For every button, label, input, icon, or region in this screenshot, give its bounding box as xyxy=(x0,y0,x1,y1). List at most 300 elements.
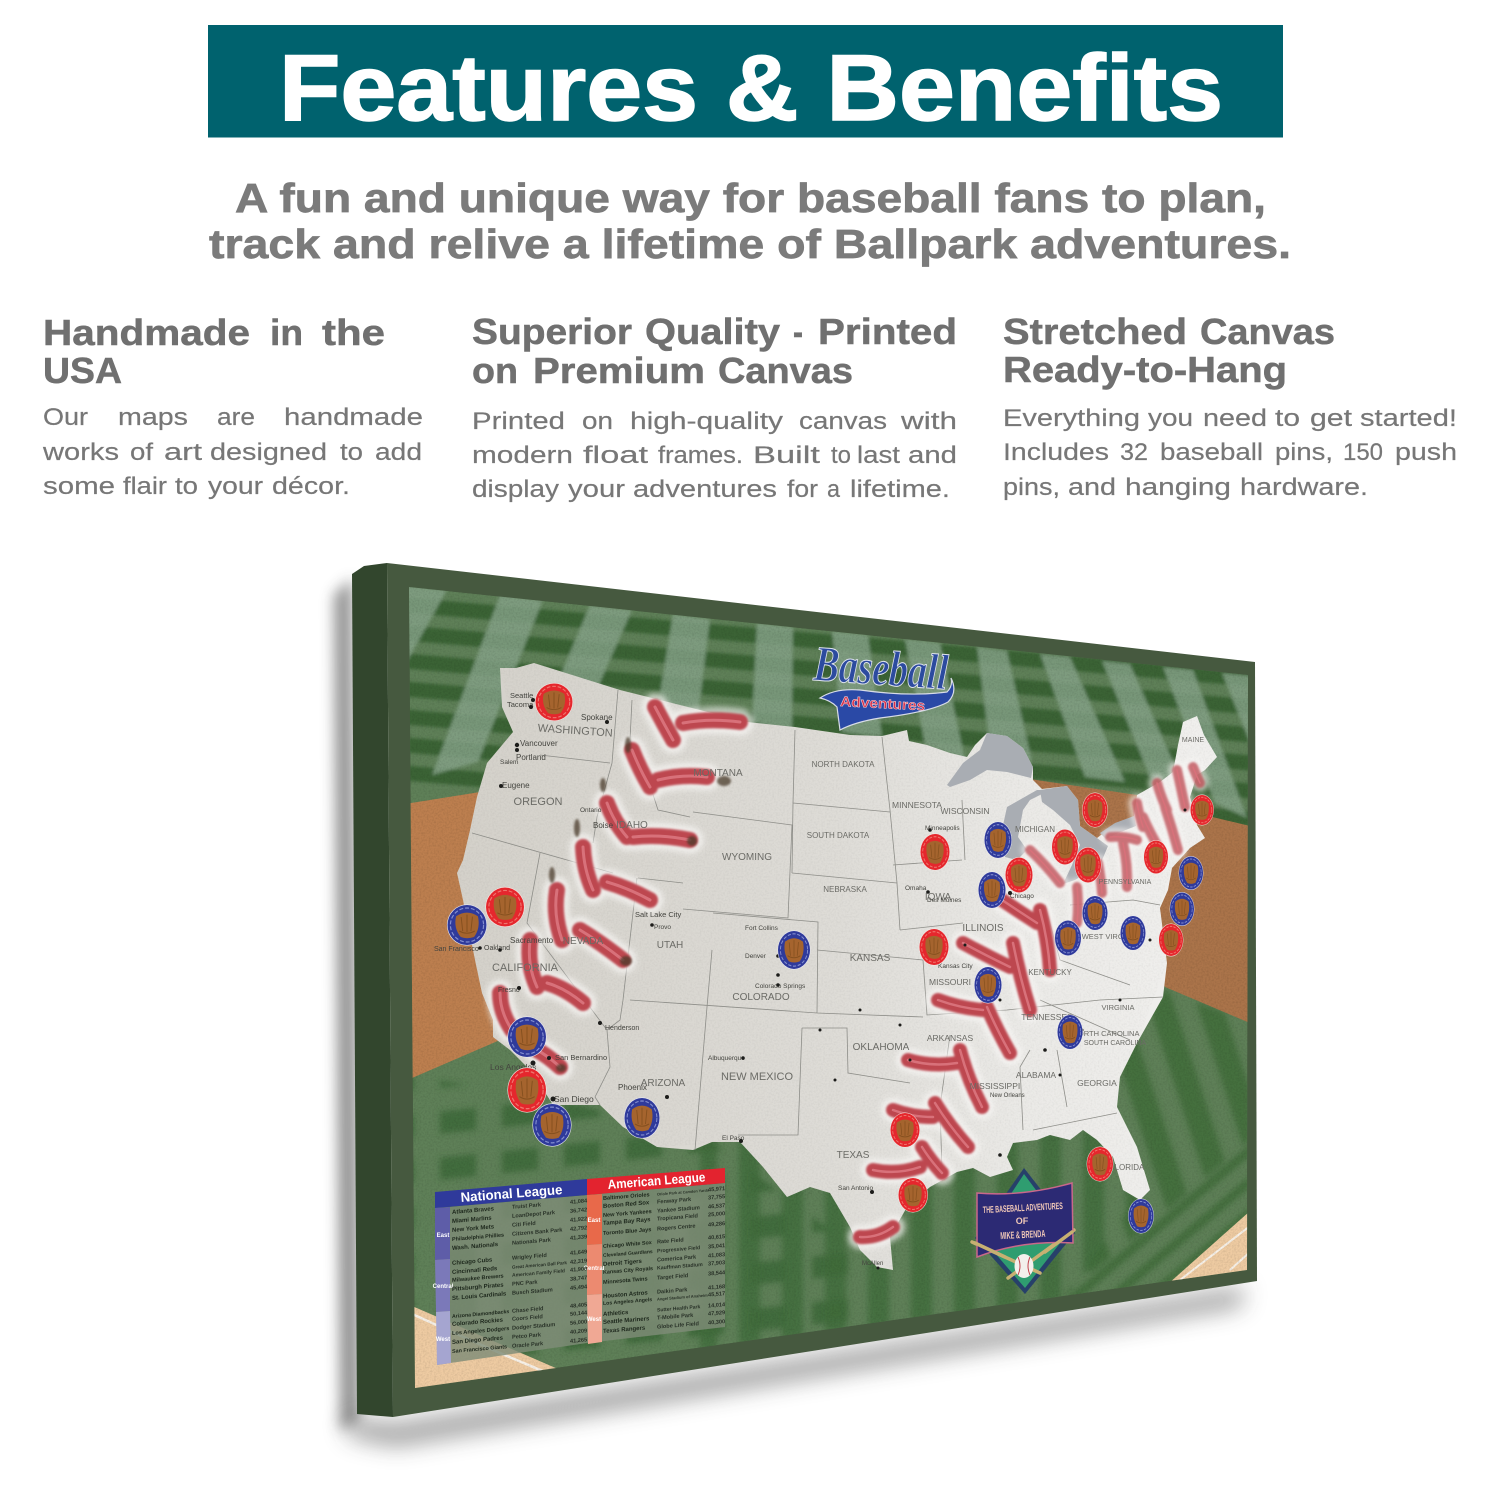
state labels: NEBRASKA xyxy=(823,885,867,894)
state labels: MISSISSIPPI xyxy=(970,1081,1020,1091)
city labels: Tacoma xyxy=(507,700,534,709)
city labels: Salem xyxy=(500,759,518,766)
American League rows: Oriole Park at Camden Yards xyxy=(657,1188,709,1197)
American League rows: Toronto Blue Jays xyxy=(603,1227,651,1237)
city labels: Eugene xyxy=(502,781,530,790)
banner title: Features & Benefits xyxy=(279,35,1223,140)
canvas drop shadow xyxy=(334,578,1245,1445)
third base line right xyxy=(1172,1214,1248,1281)
American League rows: 47,929 xyxy=(708,1310,725,1318)
American League rows: 40,615 xyxy=(708,1234,725,1242)
body: handmade: your xyxy=(208,473,263,500)
heading: superior quality: - xyxy=(793,311,803,352)
logo swoosh xyxy=(820,678,954,730)
American League rows: Athletics xyxy=(603,1310,629,1318)
stitch holes xyxy=(549,737,731,1072)
state labels: MAINE xyxy=(1182,737,1204,744)
body: handmade: to xyxy=(175,473,198,500)
heading: superior quality: Canvas xyxy=(718,350,853,391)
National League rows: American Family Field xyxy=(512,1268,565,1279)
subheading: track and relive a lifetime of Ballpark adventures. xyxy=(209,221,1291,267)
body: handmade: are xyxy=(217,404,255,431)
city labels: Portland xyxy=(516,753,546,762)
American League division bars: East xyxy=(588,1218,600,1224)
body: stretched canvas: hanging xyxy=(1125,474,1231,501)
state labels: MONTANA xyxy=(693,768,743,779)
American League rows: Cleveland Guardians xyxy=(603,1249,653,1259)
body: stretched canvas: baseball xyxy=(1160,439,1263,466)
National League rows: Chicago Cubs xyxy=(452,1257,493,1267)
American League rows: 45,517 xyxy=(708,1291,725,1299)
body: handmade: to xyxy=(340,439,363,466)
feature column: stretched canvas xyxy=(1003,311,1457,501)
blue pins: National League xyxy=(447,821,1203,1234)
National League rows: St. Louis Cardinals xyxy=(452,1291,507,1302)
city labels: Oakland xyxy=(484,945,510,952)
heading: superior quality: on xyxy=(472,350,518,391)
American League rows: Progressive Field xyxy=(657,1245,700,1255)
American League rows: 38,544 xyxy=(708,1270,726,1278)
National League rows: 36,742 xyxy=(570,1207,587,1215)
body: superior quality: a xyxy=(827,476,840,503)
National League rows: 41,265 xyxy=(570,1337,587,1345)
National League rows: Coors Field xyxy=(512,1314,543,1323)
heading: stretched canvas: Stretched xyxy=(1003,311,1187,352)
heading: handmade in the USA: the xyxy=(322,312,385,353)
plaque text: MIKE & BRENDA xyxy=(1000,1229,1046,1242)
heading: stretched canvas xyxy=(1003,311,1335,390)
great lakes xyxy=(947,733,1136,884)
city labels: Chicago xyxy=(1010,893,1034,900)
National League rows: Wrigley Field xyxy=(512,1253,547,1262)
city labels: Sacramento xyxy=(510,936,554,945)
body: superior quality: display xyxy=(472,476,560,503)
body: stretched canvas: 32 xyxy=(1120,439,1148,466)
National League rows: 38,747 xyxy=(570,1275,587,1283)
National League rows: Citi Field xyxy=(512,1221,536,1229)
American League rows: Tropicana Field xyxy=(657,1213,699,1223)
heading: handmade in the USA xyxy=(43,312,385,391)
National League division bars xyxy=(433,1207,454,1365)
state labels: TENNESSEE xyxy=(1021,1012,1073,1022)
National League rows: Truist Park xyxy=(512,1202,542,1211)
American League rows: 40,300 xyxy=(708,1319,725,1327)
outfield light stripes xyxy=(405,585,1252,818)
state labels: IDAHO xyxy=(616,820,648,831)
American League rows: 37,903 xyxy=(708,1260,725,1268)
city labels: Seattle xyxy=(510,691,533,700)
state labels: VIRGINIA xyxy=(1102,1003,1134,1012)
state labels: MISSOURI xyxy=(929,977,971,987)
American League rows: Yankee Stadium xyxy=(657,1205,700,1215)
body: superior quality: and xyxy=(908,442,957,469)
state labels: COLORADO xyxy=(732,992,790,1003)
state borders xyxy=(472,690,1163,1170)
body: stretched canvas: get xyxy=(1310,405,1352,432)
body: superior quality: lifetime. xyxy=(850,476,950,503)
city labels: Boise xyxy=(593,821,614,830)
body: superior quality: Printed xyxy=(472,408,565,435)
American League rows: 46,537 xyxy=(708,1203,725,1211)
heading: stretched canvas: Ready-to-Hang xyxy=(1003,349,1287,390)
state labels: ALABAMA xyxy=(1016,1070,1056,1080)
field artwork xyxy=(400,585,1260,1400)
state labels: ILLINOIS xyxy=(962,923,1004,934)
plaque diamond field xyxy=(982,1174,1068,1288)
heading: superior quality: Premium xyxy=(533,350,705,391)
American League rows: Chicago White Sox xyxy=(603,1240,652,1250)
body: stretched canvas: push xyxy=(1395,439,1457,466)
state labels: OKLAHOMA xyxy=(853,1042,910,1053)
city labels: New Orleans xyxy=(990,1093,1025,1099)
body: superior quality: frames. xyxy=(658,442,743,469)
body: handmade: flair xyxy=(123,473,167,500)
heading: handmade in the USA: Handmade xyxy=(43,312,250,353)
National League rows: Miami Marlins xyxy=(452,1216,492,1225)
National League rows: 41,922 xyxy=(570,1216,587,1224)
city labels: Los Angeles xyxy=(490,1062,536,1072)
National League rows: 50,144 xyxy=(570,1310,588,1318)
National League rows: San Francisco Giants xyxy=(452,1344,507,1355)
state labels: NORTH CAROLINA xyxy=(1073,1029,1139,1038)
city labels: El Paso xyxy=(722,1135,745,1142)
body: handmade: of xyxy=(130,439,153,466)
US map baseball xyxy=(434,663,1217,1270)
subheading xyxy=(209,175,1291,267)
National League rows xyxy=(452,1198,588,1355)
body: handmade: maps xyxy=(118,404,188,431)
city labels: Henderson xyxy=(605,1025,639,1032)
National League rows: 40,209 xyxy=(570,1328,587,1336)
body: handmade: works xyxy=(42,439,119,466)
field grain xyxy=(409,587,1248,1388)
baseball xyxy=(1014,1254,1034,1278)
body: stretched canvas: pins, xyxy=(1003,474,1060,501)
city labels: Fort Collins xyxy=(745,925,779,932)
state labels: GEORGIA xyxy=(1077,1078,1117,1088)
crossed bats over banner xyxy=(975,1232,1072,1257)
heading: handmade in the USA: USA xyxy=(43,350,122,391)
right infield dirt xyxy=(1030,779,1250,1023)
city labels: Phoenix xyxy=(618,1083,647,1092)
American League rows: Texas Rangers xyxy=(603,1326,646,1335)
city labels: Albuquerque xyxy=(708,1055,745,1062)
National League rows: Wash. Nationals xyxy=(452,1242,499,1252)
American League header: American League xyxy=(607,1169,706,1192)
National League division bars: East xyxy=(437,1233,449,1239)
state labels: ARIZONA xyxy=(641,1078,686,1089)
heading: superior quality: Quality xyxy=(645,311,780,352)
American League rows: Kauffman Stadium xyxy=(657,1262,703,1272)
body: handmade: add xyxy=(375,439,422,466)
American League rows: Sutter Health Park xyxy=(657,1304,700,1314)
body: stretched canvas: Everything xyxy=(1003,405,1140,432)
body: superior quality: with xyxy=(900,408,957,435)
body: superior quality: modern xyxy=(472,442,573,469)
National League rows: 48,405 xyxy=(570,1302,587,1310)
league table xyxy=(433,1168,726,1365)
National League rows: San Diego Padres xyxy=(452,1336,504,1346)
Baseball Adventures logo xyxy=(811,635,954,730)
American League rows: Target Field xyxy=(657,1273,689,1282)
body: stretched canvas: started! xyxy=(1360,405,1457,432)
banner background xyxy=(208,25,1283,138)
state labels: MICHIGAN xyxy=(1015,825,1055,834)
state labels: TEXAS xyxy=(837,1150,870,1161)
National League rows: PNC Park xyxy=(512,1280,538,1288)
seam halo xyxy=(500,707,1200,1237)
state labels: CALIFORNIA xyxy=(492,962,559,974)
city labels: Spokane xyxy=(581,713,613,722)
canvas side edge xyxy=(352,563,393,1417)
body: handmade: art xyxy=(164,439,202,466)
American League rows: Comerica Park xyxy=(657,1254,697,1264)
body: stretched canvas: Includes xyxy=(1003,439,1109,466)
body: superior quality: last xyxy=(857,442,900,469)
National League rows: Oracle Park xyxy=(512,1341,544,1350)
plaque diamond xyxy=(975,1168,1075,1294)
body: handmade: designed xyxy=(210,439,327,466)
state labels: IOWA xyxy=(925,892,951,903)
heading: superior quality xyxy=(472,311,957,391)
body: superior quality: for xyxy=(787,476,818,503)
National League header xyxy=(435,1179,587,1208)
city labels: Ontario xyxy=(580,807,602,814)
American League rows: Angel Stadium of Anaheim xyxy=(657,1293,708,1302)
National League rows: Milwaukee Brewers xyxy=(452,1274,504,1284)
body: stretched canvas xyxy=(1003,405,1457,501)
body: stretched canvas: pins, xyxy=(1275,439,1333,466)
American League rows: Houston Astros xyxy=(603,1290,648,1300)
city labels: San Francisco xyxy=(434,946,479,953)
state labels: WYOMING xyxy=(722,852,772,863)
body: stretched canvas: you xyxy=(1148,405,1193,432)
American League rows: 41,083 xyxy=(708,1252,725,1260)
National League division bars: West xyxy=(436,1337,450,1343)
state labels: NEW MEXICO xyxy=(721,1071,793,1083)
feature column: handmade xyxy=(42,312,423,500)
American League rows: Minnesota Twins xyxy=(603,1276,648,1286)
city labels: San Antonio xyxy=(838,1185,873,1192)
logo script Baseball: Baseball xyxy=(811,635,950,700)
city labels xyxy=(434,691,1034,1267)
logo Adventures: Adventures xyxy=(840,693,926,713)
National League rows: 42,792 xyxy=(570,1225,587,1233)
state labels: KENTUCKY xyxy=(1028,968,1072,977)
state labels: WISCONSIN xyxy=(940,806,990,816)
city labels: Omaha xyxy=(905,885,927,892)
heading: superior quality: Printed xyxy=(818,311,957,352)
National League rows: 41,084 xyxy=(570,1198,588,1206)
American League rows: Rogers Centre xyxy=(657,1224,695,1233)
plaque banner xyxy=(977,1183,1073,1257)
state labels: WEST VIRGINIA xyxy=(1082,932,1138,941)
American League rows: Boston Red Sox xyxy=(603,1200,650,1210)
body: handmade: Our xyxy=(43,404,88,431)
body: superior quality: to xyxy=(831,442,851,469)
National League rows: Citizens Bank Park xyxy=(512,1227,563,1238)
seam highlight xyxy=(500,707,1200,1237)
city labels: San Diego xyxy=(554,1094,594,1104)
state labels: UTAH xyxy=(657,940,683,951)
National League header: National League xyxy=(460,1182,563,1205)
National League rows: New York Mets xyxy=(452,1224,495,1234)
National League rows: Great American Ball Park xyxy=(512,1260,567,1270)
state labels xyxy=(492,722,1204,1172)
National League rows: Atlanta Braves xyxy=(452,1206,495,1216)
city labels: McAllen xyxy=(862,1261,883,1267)
body: superior quality: high-quality xyxy=(630,408,784,435)
state labels: KANSAS xyxy=(850,953,891,964)
grass base xyxy=(409,587,1248,1388)
body: superior quality: canvas xyxy=(799,408,887,435)
heading: handmade in the USA: in xyxy=(270,312,303,353)
body: superior quality: on xyxy=(582,408,613,435)
National League rows: Colorado Rockies xyxy=(452,1318,504,1328)
state labels: NORTH DAKOTA xyxy=(812,760,875,769)
feature column: superior quality xyxy=(472,311,957,503)
American League rows: Tampa Bay Rays xyxy=(603,1217,651,1227)
city labels: Colorado Springs xyxy=(755,983,806,990)
American League rows: 25,000 xyxy=(708,1211,725,1219)
state labels: PENNSYLVANIA xyxy=(1099,879,1152,886)
ballpark pins xyxy=(447,683,1214,1234)
American League rows: Kansas City Royals xyxy=(603,1266,653,1276)
American League header xyxy=(587,1168,725,1195)
American League rows: 41,168 xyxy=(708,1284,725,1292)
seam thread xyxy=(500,707,1200,1237)
American League division bars: Central xyxy=(584,1266,605,1272)
body: stretched canvas: need xyxy=(1203,405,1267,432)
baseball seam stitches xyxy=(500,707,1200,1237)
canvas frame xyxy=(387,563,1257,1417)
subheading: A fun and unique way for baseball fans to plan, xyxy=(235,175,1266,221)
American League rows xyxy=(603,1186,726,1335)
heading: stretched canvas: Canvas xyxy=(1200,311,1335,352)
body: stretched canvas: and xyxy=(1068,474,1116,501)
American League rows: Seattle Mariners xyxy=(603,1316,650,1326)
National League rows: Arizona Diamondbacks xyxy=(452,1309,509,1320)
National League rows: Dodger Stadium xyxy=(512,1322,555,1332)
personalization plaque xyxy=(972,1168,1075,1294)
lower right mowing stripes xyxy=(1062,990,1250,1298)
US outline xyxy=(457,663,1217,1270)
American League rows: 49,286 xyxy=(708,1221,725,1229)
city labels: Salt Lake City xyxy=(635,910,682,919)
state labels: OREGON xyxy=(514,796,562,808)
body: stretched canvas: to xyxy=(1275,405,1300,432)
American League rows: Detroit Tigers xyxy=(603,1259,642,1268)
body: superior quality: your xyxy=(568,476,625,503)
canvas map product xyxy=(334,563,1260,1445)
American League rows: New York Yankees xyxy=(603,1209,652,1219)
city labels: Provo xyxy=(654,924,671,931)
National League rows: 41,649 xyxy=(570,1249,587,1257)
red pins: American League xyxy=(485,683,1214,1213)
National League division bars: Central xyxy=(433,1284,454,1290)
heading: superior quality: Superior xyxy=(472,311,632,352)
National League rows: 42,319 xyxy=(570,1258,587,1266)
National League rows: Philadelphia Phillies xyxy=(452,1232,504,1243)
city labels: Fresno xyxy=(498,987,520,994)
American League rows: T-Mobile Park xyxy=(657,1313,694,1322)
American League rows: Fenway Park xyxy=(657,1197,692,1206)
outfield checks top xyxy=(410,600,1248,826)
title banner xyxy=(208,25,1283,140)
National League rows: 41,900 xyxy=(570,1266,587,1274)
body: handmade xyxy=(42,404,423,500)
city labels: Des Moines xyxy=(927,897,962,904)
diagonal mowing lines xyxy=(1070,1146,1247,1295)
American League rows: 37,755 xyxy=(708,1194,725,1202)
American League rows: 35,041 xyxy=(708,1243,725,1251)
plaque text: THE BASEBALL ADVENTURES xyxy=(983,1201,1063,1216)
National League rows: Petco Park xyxy=(512,1332,542,1341)
body: superior quality: float xyxy=(583,442,648,469)
National League rows: LoanDepot Park xyxy=(512,1210,556,1220)
body: superior quality: Built xyxy=(753,442,820,469)
state labels: SOUTH CAROLINA xyxy=(1084,1040,1146,1047)
crossed bats xyxy=(972,1230,1074,1278)
state labels: NEVADA xyxy=(563,936,604,947)
body: handmade: handmade xyxy=(284,404,423,431)
American League rows: 45,971 xyxy=(708,1186,725,1194)
left infield dirt xyxy=(405,792,500,1081)
city labels: Minneapolis xyxy=(925,825,960,832)
American League division bars xyxy=(584,1194,605,1344)
National League rows: 45,494 xyxy=(570,1284,588,1292)
American League rows: 14,014 xyxy=(708,1302,726,1310)
National League rows: Chase Field xyxy=(512,1306,544,1315)
body: superior quality: adventures xyxy=(633,476,777,503)
city labels: Denver xyxy=(745,953,767,960)
body: stretched canvas: hardware. xyxy=(1240,474,1368,501)
National League rows: Cincinnati Reds xyxy=(452,1266,498,1276)
first base line left xyxy=(410,1306,565,1392)
city dots xyxy=(478,698,1186,1270)
American League rows: Daikin Park xyxy=(657,1287,688,1296)
body: superior quality xyxy=(472,408,957,503)
American League rows: Baltimore Orioles xyxy=(603,1192,650,1202)
state labels: WASHINGTON xyxy=(537,722,613,740)
body: handmade: décor. xyxy=(272,473,350,500)
body: handmade: some xyxy=(43,473,115,500)
American League division bars: West xyxy=(587,1317,601,1323)
National League rows: Busch Stadium xyxy=(512,1287,553,1297)
state labels: FLORIDA xyxy=(1110,1163,1145,1172)
lower field checks xyxy=(413,1078,848,1356)
American League rows: Globe Life Field xyxy=(657,1321,699,1331)
National League rows: Pittsburgh Pirates xyxy=(452,1282,504,1293)
plaque text: OF xyxy=(1016,1216,1029,1226)
National League rows: Los Angeles Dodgers xyxy=(452,1326,509,1337)
plaque text xyxy=(983,1201,1063,1242)
lower field vertical stripes xyxy=(700,1130,1135,1350)
state labels: MINNESOTA xyxy=(892,800,942,810)
table background xyxy=(437,1183,725,1365)
state labels: ARKANSAS xyxy=(927,1033,973,1043)
body: stretched canvas: 150 xyxy=(1343,439,1383,466)
American League rows: Rate Field xyxy=(657,1237,684,1246)
American League rows: Los Angeles Angels xyxy=(603,1297,652,1307)
National League rows: 41,339 xyxy=(570,1234,587,1242)
National League rows: Nationals Park xyxy=(512,1237,552,1247)
city labels: Vancouver xyxy=(520,739,558,748)
city labels: Kansas City xyxy=(938,963,973,970)
map dimple texture xyxy=(457,663,1217,1270)
National League rows: 56,000 xyxy=(570,1319,587,1327)
city labels: San Bernardino xyxy=(555,1053,607,1062)
